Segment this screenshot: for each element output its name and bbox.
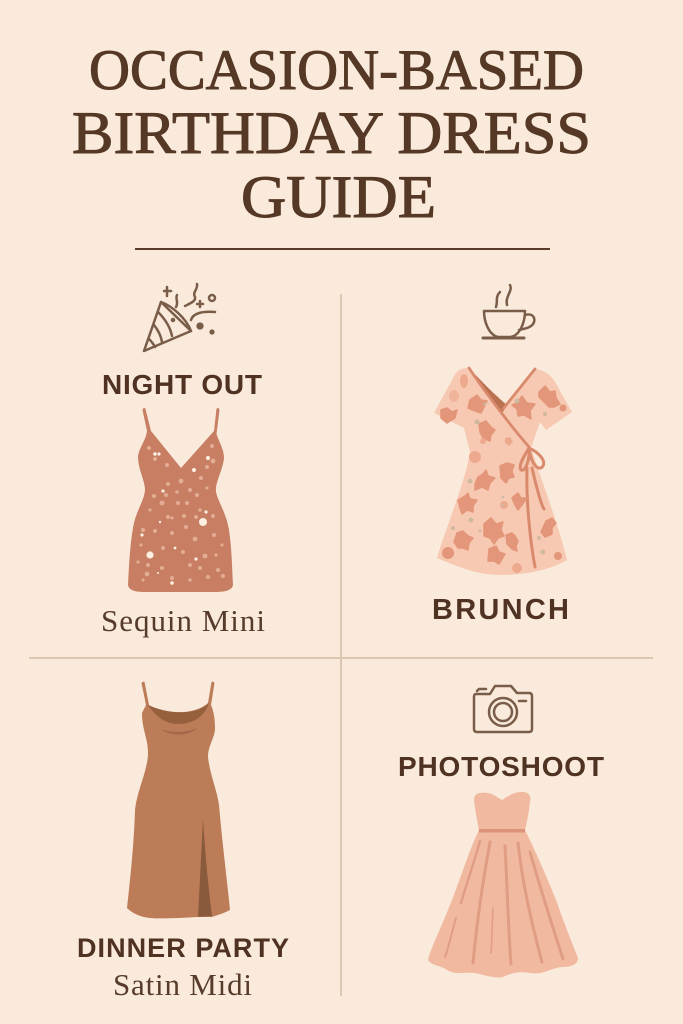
heading: night out: NIGHT OUT	[102, 369, 262, 400]
panel: night out	[101, 284, 265, 638]
heading: photoshoot: PHOTOSHOOT	[398, 751, 604, 782]
icon: camera	[474, 686, 532, 732]
title: BIRTHDAY DRESS	[72, 100, 591, 166]
panel: photoshoot	[398, 686, 604, 978]
heading: brunch: BRUNCH	[432, 594, 569, 626]
caption: satin midi: Satin Midi	[113, 967, 252, 1002]
heading: dinner party: DINNER PARTY	[77, 933, 289, 963]
icon: party popper	[144, 284, 215, 351]
panel: dinner party	[77, 682, 289, 1002]
title: OCCASION-BASED	[89, 39, 584, 102]
icon: coffee cup	[483, 285, 534, 338]
caption: sequin mini: Sequin Mini	[101, 603, 265, 638]
dress: satin midi	[127, 682, 230, 918]
title	[72, 39, 591, 230]
title: GUIDE	[241, 164, 436, 230]
dress: strapless gown	[428, 792, 578, 978]
dress: floral wrap	[434, 368, 572, 575]
dress: sequin mini	[128, 408, 233, 592]
panel: brunch	[432, 285, 572, 626]
